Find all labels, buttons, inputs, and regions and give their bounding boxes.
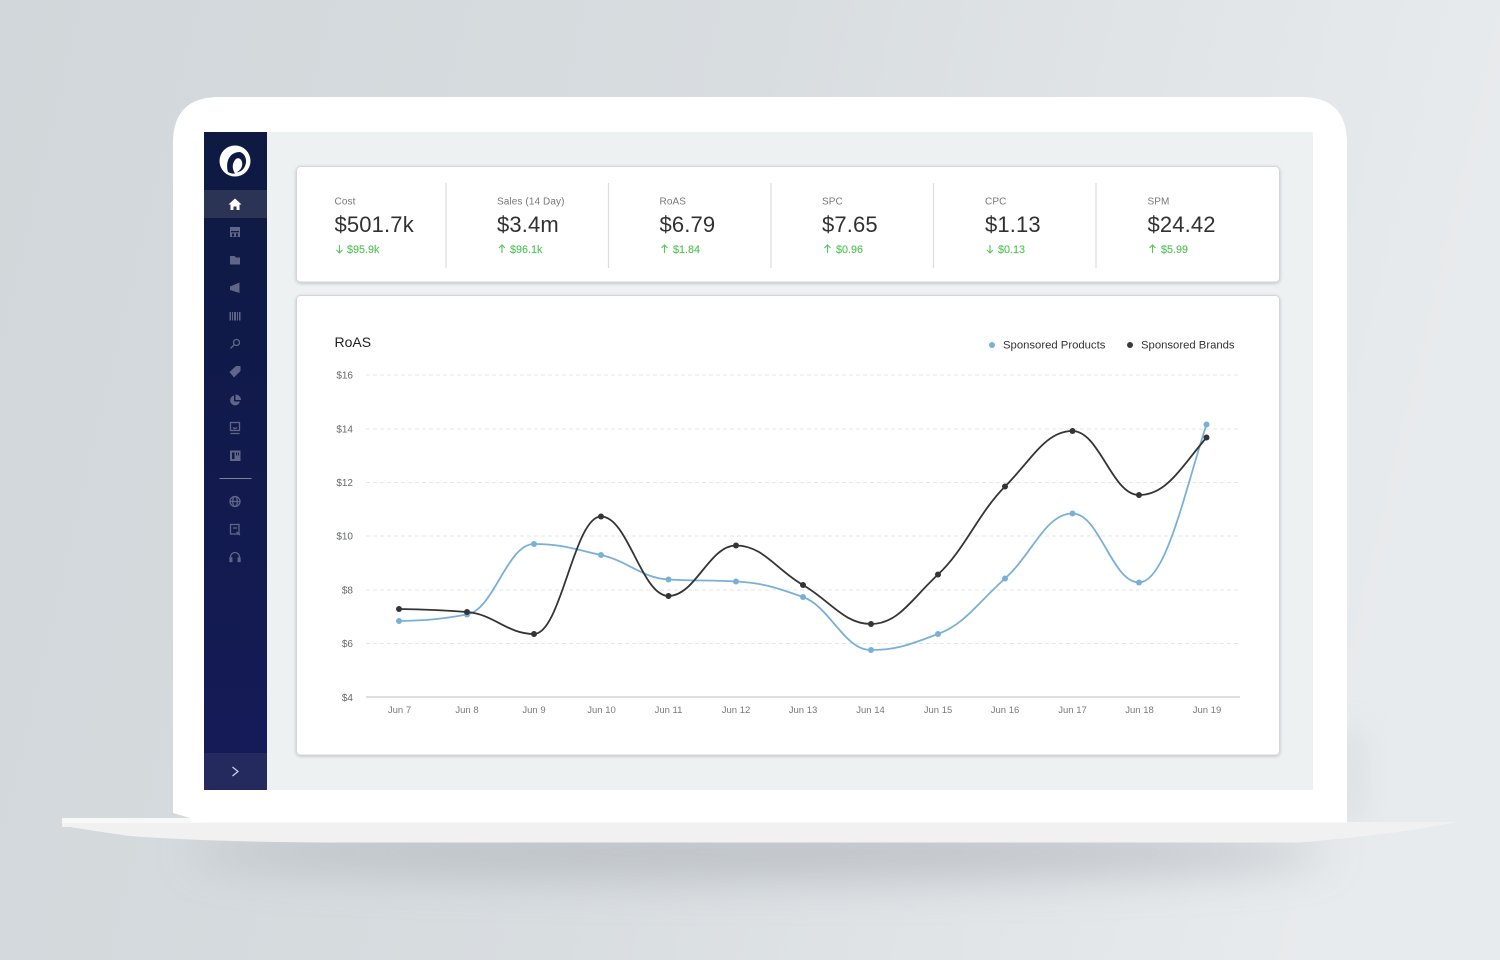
icon: headset: [230, 552, 240, 562]
x axis labels: Jun 9: [522, 705, 546, 716]
KPI: RoAS: $1.84: [673, 244, 700, 256]
KPI: SPC: [822, 196, 878, 256]
icon: search: [230, 340, 240, 348]
screen: [204, 132, 1313, 790]
y axis labels: $10: [336, 532, 353, 542]
x axis labels: Jun 8: [455, 705, 479, 716]
x axis labels: Jun 15: [924, 705, 952, 716]
y axis labels: $8: [342, 586, 353, 596]
KPI: RoAS: [660, 196, 715, 256]
KPI: SPC: SPC: [822, 196, 843, 208]
x axis labels: Jun 11: [655, 705, 682, 716]
active nav row: [204, 190, 267, 218]
laptop shadow: [190, 730, 1364, 878]
y axis labels: [336, 370, 353, 704]
y axis labels: $16: [336, 370, 353, 382]
KPI: Sales: Sales (14 Day): [497, 196, 565, 208]
icon: store: [230, 227, 240, 237]
logo: [220, 146, 250, 176]
laptop base: [62, 818, 1456, 842]
KPI: SPM: SPM: [1148, 196, 1169, 208]
icon: home: [228, 198, 242, 210]
KPI: RoAS: $6.79: [660, 212, 715, 237]
x axis labels: Jun 13: [789, 705, 817, 716]
icon: book search: [230, 524, 240, 535]
KPI: Cost: $501.7k: [334, 212, 415, 237]
x axis labels: Jun 7: [388, 705, 411, 716]
icon: barcode: [230, 312, 240, 320]
KPI: Cost: [334, 196, 415, 256]
x axis labels: Jun 16: [991, 705, 1019, 716]
KPI: CPC: [985, 196, 1041, 256]
legend: [989, 340, 1235, 352]
icon: megaphone: [230, 282, 240, 293]
x axis labels: Jun 17: [1058, 705, 1087, 716]
icon: tag: [230, 366, 240, 378]
KPI: Cost: $95.9k: [347, 244, 380, 256]
y axis labels: $12: [336, 478, 353, 489]
sidebar expand button: [204, 753, 267, 790]
KPI: Sales: $3.4m: [497, 212, 559, 237]
sidebar divider: [220, 478, 252, 479]
y axis labels: $4: [342, 693, 353, 704]
x axis labels: Jun 14: [856, 705, 885, 716]
y axis labels: $6: [342, 639, 353, 650]
KPI: CPC: $0.13: [998, 244, 1025, 256]
laptop lid: [173, 97, 1347, 822]
panel: RoAS chart: [296, 296, 1280, 755]
x axis labels: Jun 19: [1193, 705, 1221, 716]
KPI: RoAS: RoAS: [660, 196, 686, 208]
panel: KPI summary: [296, 166, 1280, 282]
KPI: CPC: CPC: [985, 196, 1006, 208]
icon: pie chart: [230, 394, 241, 405]
KPI: CPC: $1.13: [985, 212, 1041, 237]
KPI: SPM: $24.42: [1148, 212, 1216, 237]
icon: globe: [230, 496, 240, 506]
x axis labels: [388, 705, 1221, 716]
chart title: RoAS: [334, 334, 371, 350]
KPI: Sales: $96.1k: [510, 244, 543, 256]
icon: board: [230, 450, 240, 461]
line: Sponsored Brands: [396, 428, 1210, 637]
KPI: SPC: $0.96: [836, 244, 863, 256]
legend: Sponsored Brands: [1141, 340, 1235, 352]
icon: folder: [230, 256, 240, 264]
legend: Sponsored Products: [1003, 340, 1106, 352]
KPI: SPM: $5.99: [1161, 244, 1188, 256]
y axis labels: $14: [336, 424, 353, 436]
line: Sponsored Products: [396, 422, 1210, 653]
KPI: SPC: $7.65: [822, 212, 878, 237]
x axis labels: Jun 12: [722, 705, 750, 716]
KPI: Cost: Cost: [334, 196, 356, 208]
icon: report: [230, 422, 240, 434]
x axis labels: Jun 10: [587, 705, 616, 716]
KPI: Sales: [497, 196, 565, 256]
KPI: SPM: [1148, 196, 1216, 256]
x axis labels: Jun 18: [1125, 705, 1154, 716]
sidebar: [204, 132, 267, 790]
